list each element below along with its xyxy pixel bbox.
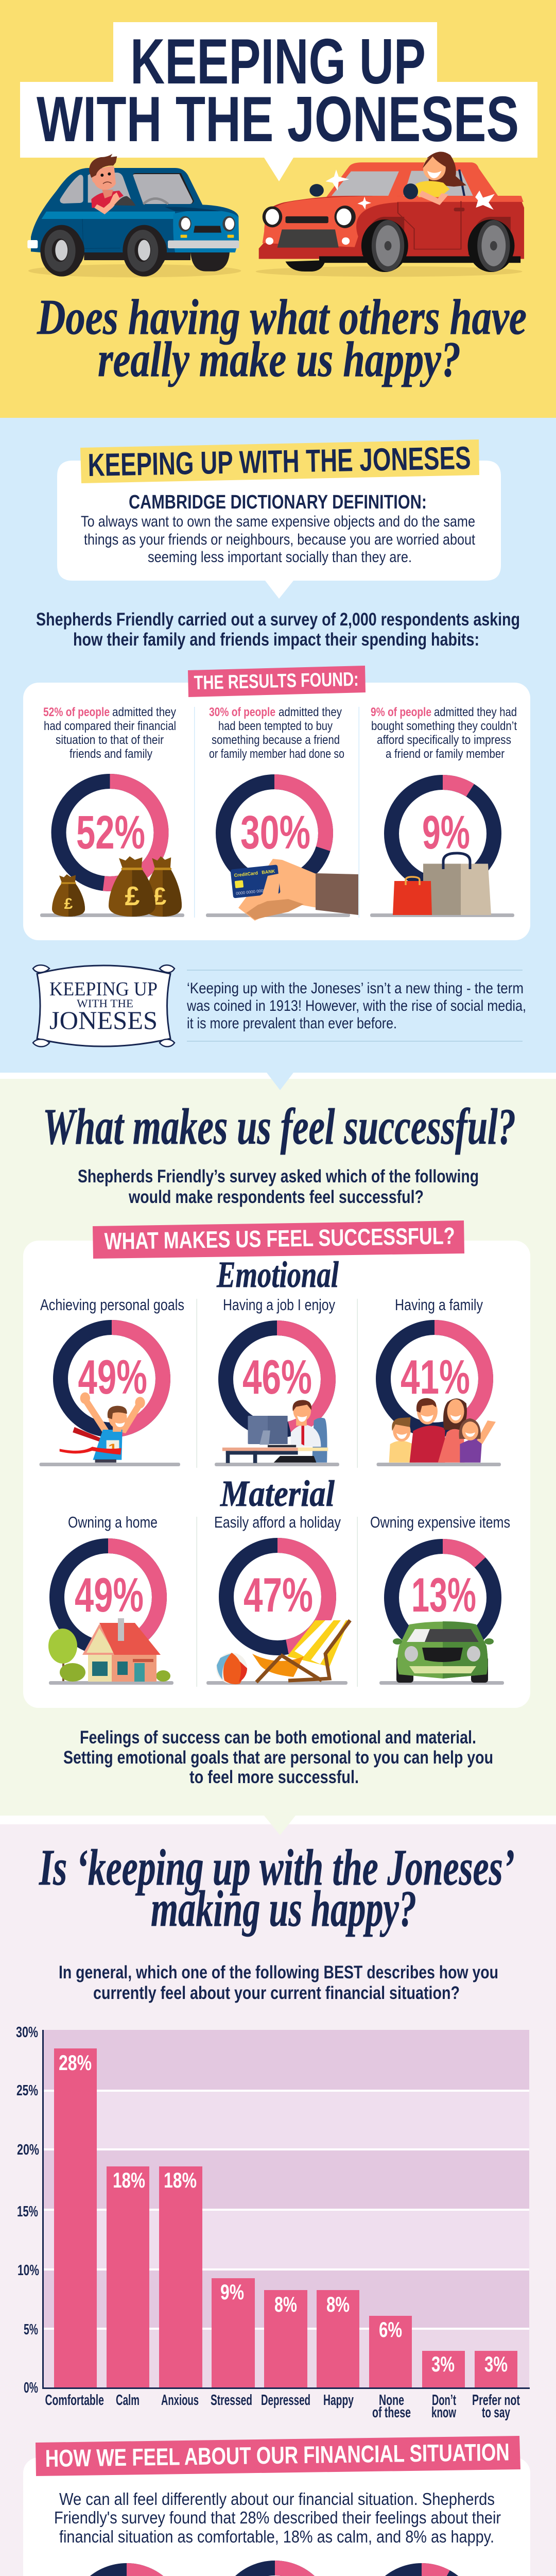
illustration: family of four xyxy=(389,1398,496,1463)
section: header xyxy=(0,0,556,418)
illustration: house with tree xyxy=(48,1618,173,1685)
x axis labels: of these xyxy=(372,2404,411,2421)
vintage sign: JONESES xyxy=(49,1006,158,1035)
bar chart: feelings about financial situation xyxy=(16,2024,530,2421)
bars xyxy=(54,2048,517,2388)
section: definition and results xyxy=(0,418,556,1073)
icon: hand holding credit card: 0000 0000 0000 0000 xyxy=(236,887,276,896)
stat text: 30%: admitted they xyxy=(279,705,342,719)
panel: results found xyxy=(23,666,530,940)
x axis labels: Don’t xyxy=(432,2392,456,2409)
item: having a job i enjoy xyxy=(215,1296,339,1466)
item: having a family xyxy=(377,1296,501,1466)
donut chart: 30% xyxy=(223,782,325,884)
item: achieving personal goals: Achieving personal goals xyxy=(40,1296,184,1314)
icon: hand holding credit card: BANK xyxy=(262,869,275,875)
x axis labels: Calm xyxy=(116,2392,140,2409)
vintage sign xyxy=(33,965,175,1047)
y axis labels xyxy=(16,2024,39,2396)
item: owning a home xyxy=(48,1513,173,1685)
stat text: 30%: 30% of people xyxy=(209,705,275,719)
illustration: beach ball and deck chair xyxy=(206,1620,350,1685)
pink heading ribbon: THE RESULTS FOUND: xyxy=(194,669,359,694)
closing statement xyxy=(63,1727,493,1787)
y axis labels: 10% xyxy=(18,2262,39,2279)
item: having a family: 41% xyxy=(401,1350,470,1404)
x axis labels: Comfortable xyxy=(45,2392,104,2409)
x axis labels: None xyxy=(379,2392,404,2409)
section heading: making us happy? xyxy=(151,1880,416,1937)
y axis labels: 0% xyxy=(24,2380,38,2396)
bars: 18% xyxy=(113,2168,145,2192)
subheading: material: Material xyxy=(220,1473,335,1514)
bars: 3% xyxy=(431,2352,455,2376)
item: owning expensive items xyxy=(370,1513,510,1685)
bars: 9% xyxy=(220,2280,244,2304)
panel: how we feel xyxy=(23,2436,530,2576)
stat text: 30%: had been tempted to buy xyxy=(218,719,333,733)
section heading xyxy=(39,1839,515,1937)
panel: success factors xyxy=(23,1221,530,1708)
y axis labels: 15% xyxy=(17,2204,38,2220)
icon: money bags: £ xyxy=(64,895,73,912)
history note xyxy=(186,980,526,1032)
pink heading ribbon: WHAT MAKES US FEEL SUCCESSFUL? xyxy=(104,1222,455,1255)
illustration: runner crossing the line: 1 xyxy=(108,1441,117,1454)
icon: money bags: £ xyxy=(153,883,167,910)
positive feelings text: Friendly's survey found that 28% described their feelings about their xyxy=(54,2508,501,2527)
bars: 28% xyxy=(59,2050,92,2075)
item: owning expensive items: Owning expensive items xyxy=(370,1513,510,1531)
stat text: 9%: bought something they couldn’t xyxy=(371,719,517,733)
donut chart: 18% calm xyxy=(223,2568,326,2576)
x axis labels: Anxious xyxy=(161,2392,199,2409)
definition speech bubble xyxy=(57,439,501,599)
illustration: shiny red car with happy woman xyxy=(256,151,524,277)
donut chart: 9%: 9% xyxy=(422,806,470,859)
x axis labels: Depressed xyxy=(261,2392,310,2409)
vintage sign: KEEPING UP xyxy=(49,978,158,1000)
donut chart: 52% xyxy=(59,781,161,884)
donut chart: 28% comfortable xyxy=(75,2571,178,2576)
dictionary definition text: To always want to own the same expensive objects and do the same xyxy=(81,513,475,530)
positive feelings text xyxy=(54,2489,501,2546)
x axis labels: Prefer not xyxy=(472,2392,520,2409)
subtitle xyxy=(37,290,527,387)
icon: money bags: £ xyxy=(125,882,140,911)
stat text: 9% xyxy=(371,705,517,761)
item: having a job i enjoy: 46% xyxy=(242,1350,312,1404)
stat text: 9%: a friend or family member xyxy=(386,747,505,761)
y axis labels: 25% xyxy=(16,2082,38,2099)
survey question xyxy=(59,1962,498,2003)
item: having a family: Having a family xyxy=(395,1296,483,1314)
item: owning a home: Owning a home xyxy=(68,1513,158,1531)
survey introduction xyxy=(36,609,520,650)
stat text: 52%: had compared their financial xyxy=(44,719,176,733)
donut chart: 8% happy xyxy=(371,2571,473,2576)
item: easily afford a holiday: Easily afford a holiday xyxy=(214,1513,341,1531)
history note: it is more prevalent than ever before. xyxy=(187,1015,397,1032)
subtitle: really make us happy? xyxy=(98,332,461,387)
bars: 8% xyxy=(274,2292,297,2316)
stat text: 30%: something because a friend xyxy=(212,733,340,747)
survey question: currently feel about your current financial situation? xyxy=(93,1983,460,2003)
dictionary definition text: CAMBRIDGE DICTIONARY DEFINITION: xyxy=(129,492,427,513)
stat text: 52%: friends and family xyxy=(70,747,152,761)
icon: money bags xyxy=(52,856,182,917)
stat text: 9%: 9% of people xyxy=(371,705,431,719)
stat text: 30%: or family member had done so xyxy=(209,747,344,761)
bars: 3% xyxy=(484,2352,508,2376)
pink heading ribbon xyxy=(188,666,366,697)
y axis labels: 30% xyxy=(16,2024,38,2041)
x axis labels: to say xyxy=(482,2404,510,2421)
bars: 18% xyxy=(164,2168,197,2192)
stat text: 52% xyxy=(43,705,176,761)
dictionary definition text xyxy=(81,492,476,566)
icon: shopping bags xyxy=(393,853,491,915)
y axis labels: 20% xyxy=(17,2142,39,2158)
x axis labels: know xyxy=(431,2404,456,2421)
stat text: 52%: 52% of people xyxy=(43,705,110,719)
title speech bubble xyxy=(20,22,537,181)
survey introduction: how their family and friends impact their spending habits: xyxy=(73,630,479,650)
icon: hand holding credit card: CreditCard xyxy=(234,870,258,878)
illustration: man at office desk xyxy=(222,1400,328,1463)
donut chart: 9% xyxy=(391,782,494,885)
illustration: runner crossing the line xyxy=(60,1393,145,1463)
x axis labels xyxy=(45,2392,520,2421)
donut chart: 52%: 52% xyxy=(76,806,145,859)
vintage sign: WITH THE xyxy=(77,997,133,1010)
section: is it making us happy xyxy=(0,1816,556,2576)
bars: 6% xyxy=(379,2317,402,2342)
item: easily afford a holiday xyxy=(206,1513,350,1685)
illustration: blue car with unhappy man xyxy=(27,154,241,277)
item: owning a home: 49% xyxy=(75,1568,144,1622)
stat text: 52%: situation to that of their xyxy=(56,733,164,747)
section intro xyxy=(78,1166,479,1207)
icon: hand holding credit card xyxy=(230,859,358,921)
positive feelings text: We can all feel differently about our financial situation. Shepherds xyxy=(59,2489,495,2509)
section intro: would make respondents feel successful? xyxy=(128,1187,424,1207)
stat text: 30% xyxy=(209,705,344,761)
positive feelings text: financial situation as comfortable, 18% as calm, and 8% as happy. xyxy=(59,2527,494,2546)
dictionary definition text: seeming less important socially than they are. xyxy=(148,549,412,566)
stat text: 9%: admitted they had xyxy=(434,705,517,719)
subheading: emotional: Emotional xyxy=(216,1254,339,1295)
item: easily afford a holiday: 47% xyxy=(244,1568,313,1622)
title speech bubble: KEEPING UP xyxy=(130,26,426,97)
bars: 8% xyxy=(326,2292,350,2316)
stat text: 9%: afford specifically to impress xyxy=(377,733,511,747)
stat text: 52%: admitted they xyxy=(112,705,176,719)
section: what makes us feel successful xyxy=(0,1073,556,1816)
item: having a job i enjoy: Having a job I enjoy xyxy=(223,1296,335,1314)
x axis labels: Happy xyxy=(323,2392,354,2409)
item: achieving personal goals xyxy=(39,1296,184,1466)
donut chart: 30%: 30% xyxy=(240,806,310,859)
closing statement: Feelings of success can be both emotional and material. xyxy=(80,1727,476,1748)
closing statement: to feel more successful. xyxy=(189,1767,359,1787)
item: achieving personal goals: 49% xyxy=(78,1350,147,1404)
illustration: green car xyxy=(379,1621,504,1685)
x axis labels: Stressed xyxy=(211,2392,252,2409)
item: owning expensive items: 13% xyxy=(411,1568,476,1622)
y axis labels: 5% xyxy=(24,2321,38,2338)
dictionary definition text: things as your friends or neighbours, because you are worried about xyxy=(84,531,476,548)
